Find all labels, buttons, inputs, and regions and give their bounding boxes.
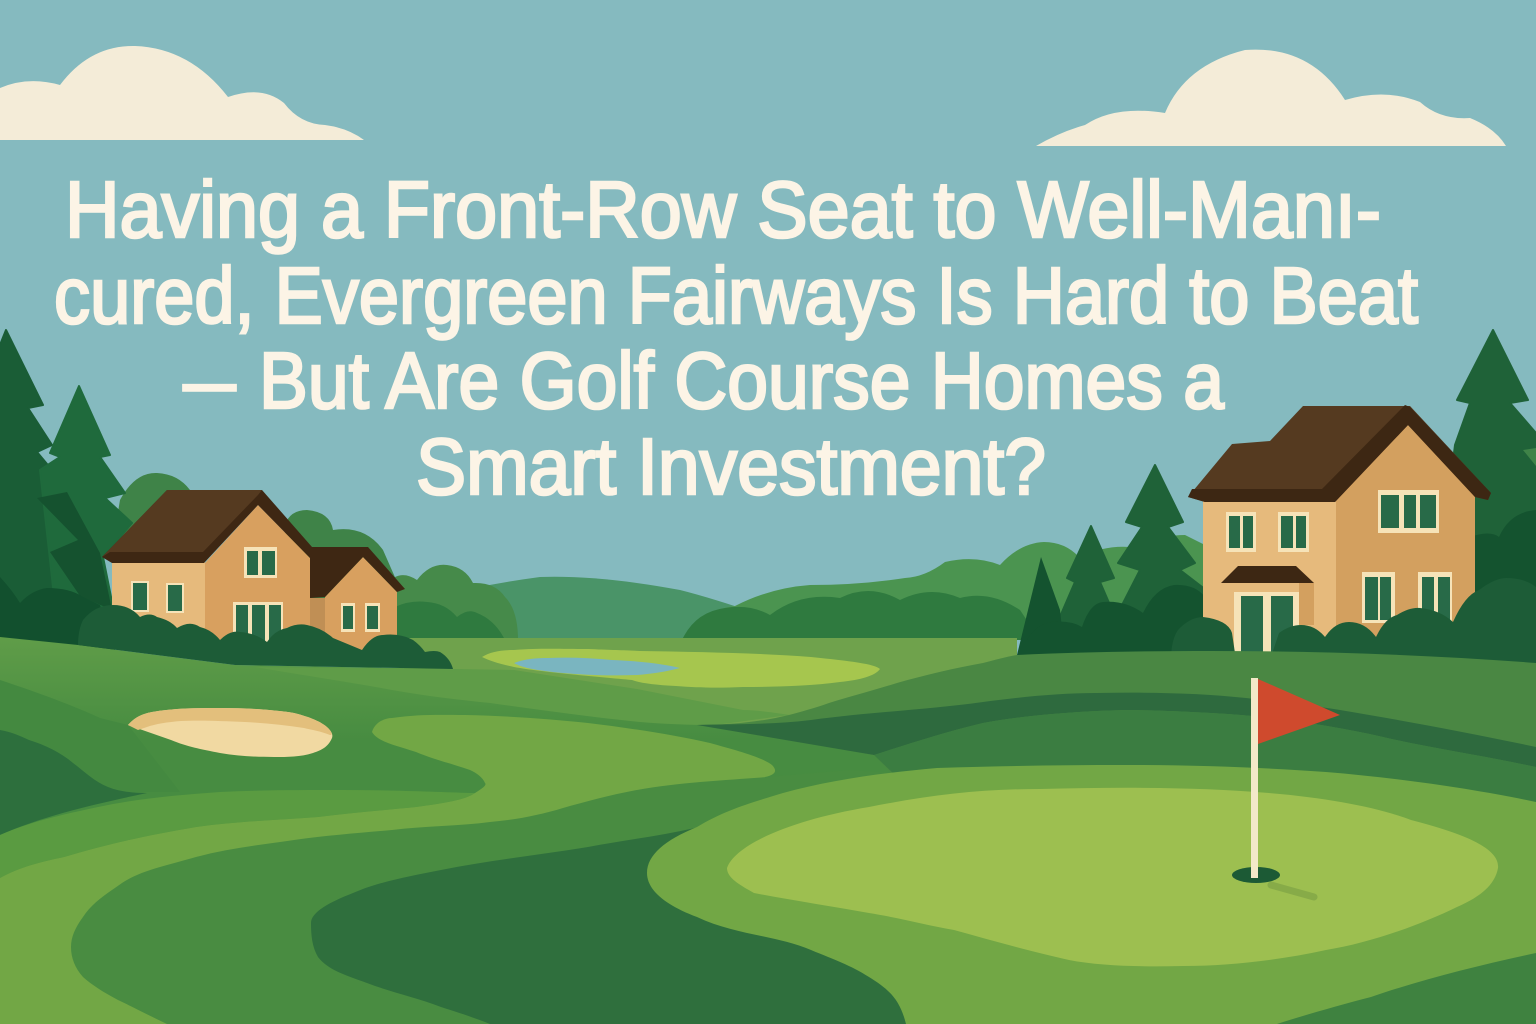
dark stripe [697,693,1536,767]
roof main [102,490,405,598]
title [54,165,1418,511]
tree: medium [1050,526,1125,640]
left slope dark shade [0,680,180,792]
tree: tall [1110,465,1206,650]
right foreground bushes [1171,578,1536,670]
bunker [128,708,332,757]
wall right [1335,425,1475,640]
wall main [205,505,310,650]
mid bushes centre right [682,535,1205,640]
right hill [697,651,1536,820]
bushes behind left house [110,473,405,600]
distant hills [420,577,790,645]
wall light [112,560,205,645]
tree: far left [0,330,90,650]
windows upper left [1226,490,1452,623]
far ground [404,638,1017,760]
tree: second left [40,386,132,650]
left darkest slope [0,730,147,835]
far band [255,667,790,725]
pond green [482,649,880,688]
tree line left [0,330,132,650]
tree line right [1017,330,1536,655]
window frames [131,547,380,644]
green band [0,790,475,878]
cloud right [1036,50,1506,146]
golf flag [1232,678,1340,897]
pole [1251,678,1258,878]
hole [1232,867,1280,883]
winding light fairway [0,715,775,1024]
annex link [310,598,326,648]
title: cured, Evergreen Fairways Is Hard to Beat [54,251,1418,340]
title: But Are Golf Course Homes a [259,336,1224,425]
roof [1188,406,1491,502]
window panes [1229,495,1450,620]
tree: small dark [1017,557,1065,655]
cloud left [0,46,364,140]
annex wall [325,557,397,655]
title: Smart Investment? [416,422,1046,511]
mid bushes left [395,565,518,640]
pond [514,658,680,675]
left house [102,490,405,655]
pole shadow [1271,885,1314,897]
title: — [183,336,236,425]
title: Having a Front-Row Seat to Well-Manı- [65,165,1381,254]
bottom right corner [1270,940,1536,1024]
left foreground bushes [78,605,453,669]
dark swale [311,828,920,1024]
tree shadow [37,492,112,610]
putting surround [647,765,1536,1024]
right house [1188,405,1491,655]
tree: big right [1430,330,1536,650]
ground base [0,637,950,1024]
putting green [727,788,1498,966]
porch [1299,583,1314,625]
lower hill [874,710,1536,815]
window panes [133,551,378,645]
wall left [1203,500,1336,655]
inner fairway [71,770,920,1024]
pennant [1258,679,1340,744]
dark bushes [1027,585,1205,655]
